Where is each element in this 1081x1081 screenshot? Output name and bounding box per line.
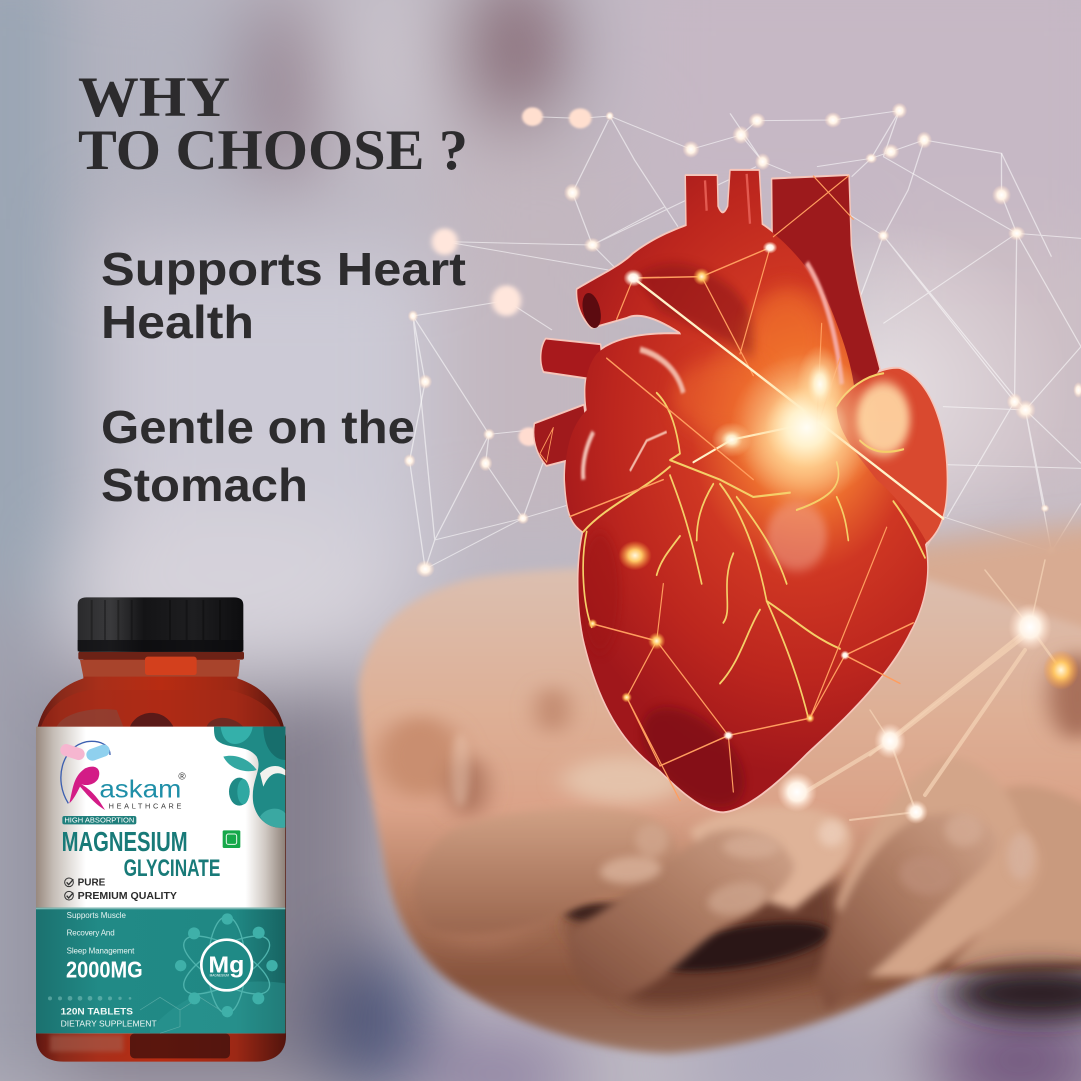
label benefit text: Sleep Management — [67, 947, 135, 956]
brand logo: askam — [99, 775, 181, 803]
pack size and type: 120N TABLETS — [61, 1006, 133, 1016]
label benefit text: Supports Muscle — [67, 911, 127, 920]
right forearm haze — [860, 517, 1081, 967]
label teal blobs — [214, 727, 285, 828]
heart pale outline — [534, 171, 947, 811]
bottle label — [36, 727, 285, 1033]
product name: GLYCINATE — [124, 855, 220, 882]
background network lines and nodes — [403, 103, 1081, 578]
brand logo — [59, 741, 186, 811]
feature checklist: PURE — [78, 878, 105, 889]
product name: MAGNESIUM — [62, 826, 188, 857]
feature checklist — [65, 878, 177, 902]
benefit: gentle on the stomach — [101, 401, 415, 511]
coronary arteries — [583, 373, 925, 718]
magnesium atom icon: MAGNESIUM — [210, 974, 229, 978]
title: TO CHOOSE ? — [78, 119, 468, 182]
background: cupped hands — [359, 517, 1081, 1053]
high absorption badge: HIGH ABSORPTION — [64, 818, 134, 825]
palm silhouette — [359, 566, 1081, 1053]
finger highlights — [598, 813, 1034, 921]
label benefit text — [67, 911, 135, 956]
teal label panel — [36, 908, 285, 1033]
shadow under fingers — [564, 877, 846, 1005]
pack size and type: DIETARY SUPPLEMENT — [61, 1019, 157, 1029]
heart highlights — [579, 174, 842, 480]
dose: 2000MG — [66, 956, 143, 982]
heart glow nodes — [588, 242, 883, 740]
shadow below right hand — [950, 967, 1081, 1020]
bottle cap — [78, 597, 243, 652]
label benefit text: Recovery And — [67, 929, 115, 938]
vegetarian mark — [223, 830, 240, 848]
network lines over heart — [540, 176, 943, 801]
product name — [62, 826, 220, 882]
benefit: gentle on the stomach: Stomach — [101, 459, 308, 511]
fingers — [416, 757, 1081, 1010]
benefit: supports heart health: Supports Heart — [101, 243, 466, 295]
feature checklist: PREMIUM QUALITY — [78, 891, 177, 902]
benefit: gentle on the stomach: Gentle on the — [101, 401, 415, 453]
bottle glass — [36, 652, 286, 1062]
title — [78, 66, 468, 182]
illustration: glowing human heart — [534, 171, 947, 828]
heart chambers — [534, 171, 947, 811]
pack size and type — [61, 1006, 157, 1029]
brand logo: ® — [178, 771, 186, 782]
benefit: supports heart health: Health — [101, 296, 254, 348]
heart shading — [580, 263, 910, 828]
benefit: supports heart health — [101, 243, 466, 348]
magnesium atom icon — [175, 913, 278, 1017]
brand logo: HEALTHCARE — [109, 802, 181, 811]
title: WHY — [78, 66, 230, 129]
magnesium atom icon: Mg — [208, 952, 244, 978]
lower right network over hands — [777, 560, 1079, 824]
product: magnesium glycinate bottle — [36, 597, 286, 1062]
